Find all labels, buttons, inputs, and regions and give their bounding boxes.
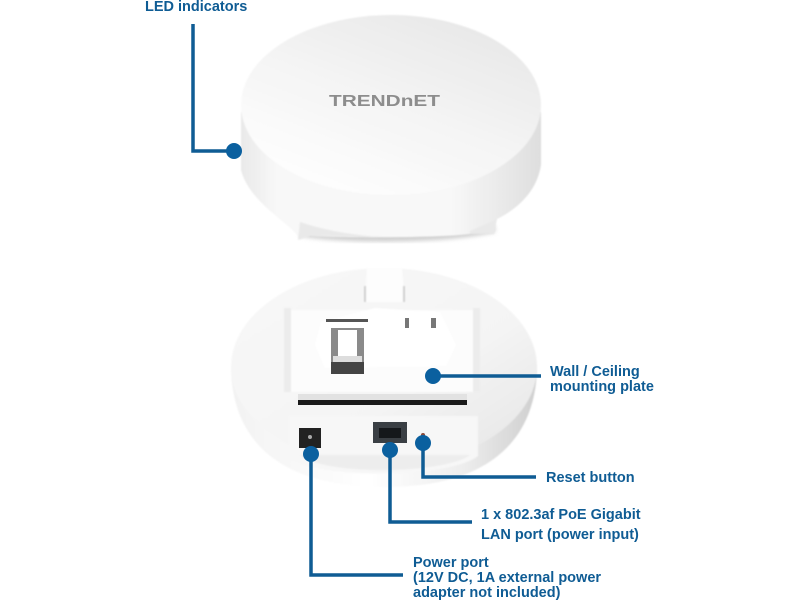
- tab shade left: [364, 286, 366, 302]
- latch barcode label: [331, 328, 364, 374]
- marker: [226, 143, 242, 159]
- label: mounting plate: [550, 379, 654, 395]
- callout: reset button: [415, 435, 635, 486]
- device: top view of access point: [241, 15, 541, 242]
- label: LAN port (power input): [481, 527, 639, 543]
- latch dark slot: [326, 319, 368, 322]
- leader line: [423, 443, 536, 477]
- plate right rib: [473, 308, 480, 392]
- leader line: [311, 454, 403, 575]
- label: Reset button: [546, 470, 635, 486]
- marker: [303, 446, 319, 462]
- port recess: [289, 416, 478, 474]
- label: Power port: [413, 555, 489, 571]
- device top face: [241, 15, 541, 195]
- underside face: [231, 268, 537, 466]
- plate left rib: [284, 308, 291, 392]
- device body: [241, 15, 541, 240]
- device body side wall: [241, 112, 541, 240]
- callout: LAN port: [382, 442, 641, 543]
- label: Wall / Ceiling: [550, 364, 640, 380]
- reset hole: [421, 433, 425, 437]
- leader line: [193, 24, 234, 151]
- warning strip: [298, 394, 467, 400]
- callout: power port: [303, 446, 601, 600]
- callout: mounting plate: [425, 364, 654, 395]
- DC-in port: [299, 428, 321, 448]
- device: underside view with ports: [231, 268, 537, 487]
- label: 1 x 802.3af PoE Gigabit: [481, 507, 641, 523]
- ethernet port: [373, 422, 407, 443]
- underside shell: [231, 268, 537, 487]
- bottom notch right: [470, 219, 497, 234]
- leader line: [390, 450, 472, 522]
- marker: [425, 368, 441, 384]
- label: (12V DC, 1A external power: [413, 570, 601, 586]
- brand logo: TRENDnET: [329, 93, 440, 110]
- leader line: [433, 374, 541, 378]
- callout: LED indicators: [145, 0, 247, 159]
- tab shade right: [403, 286, 405, 302]
- bottom notch left: [298, 222, 385, 240]
- marker: [382, 442, 398, 458]
- marker: [415, 435, 431, 451]
- plate latch module: [315, 308, 456, 368]
- plate top tab: [365, 268, 405, 302]
- black port label bar: [298, 400, 467, 405]
- latch right clips: [405, 318, 436, 328]
- underside body wall: [231, 365, 537, 487]
- recess lower band: [300, 455, 470, 470]
- mounting plate: [290, 310, 480, 392]
- soft shadow under device: [300, 226, 495, 242]
